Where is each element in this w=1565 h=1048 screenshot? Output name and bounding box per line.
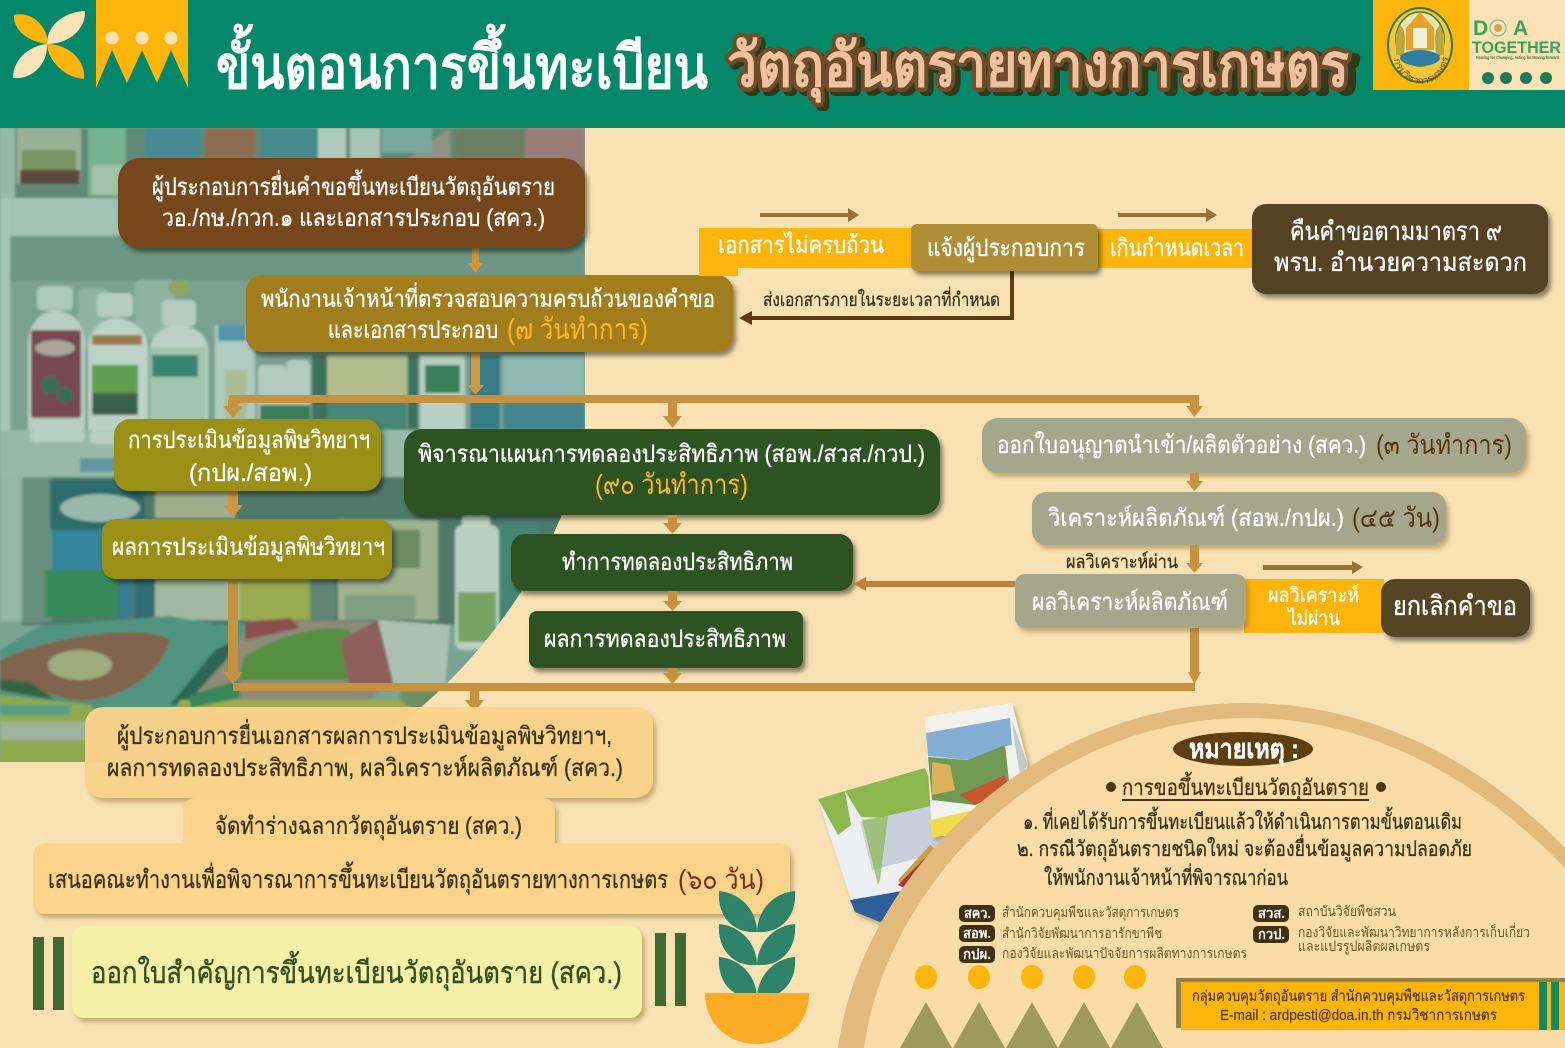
text: failed line 1: ผลวิเคราะห์ [1268, 584, 1359, 607]
logo block: department seal: กรมวิชาการเกษตร [1394, 56, 1448, 84]
text: analysis result: ผลวิเคราะห์ผลิตภัณฑ์ [1032, 588, 1228, 616]
text: applicant line 2: วอ./กษ./กวก.๑ และเอกสารประกอบ (สคว.) [162, 205, 545, 232]
box: toxicology result [102, 519, 392, 579]
panel: notes arch [838, 703, 1565, 1048]
text: officer duration: (๗ วันทำการ) [507, 314, 648, 346]
box: analysis result [1015, 574, 1246, 628]
legend: สอพ [959, 925, 1162, 942]
icon: yellow crown [96, 0, 188, 88]
box: working group [33, 843, 790, 914]
arrow: branch to import licence [1186, 400, 1203, 417]
text: note 2 continued: ให้พนักงานเจ้าหน้าที่พิจารณาก่อน [1044, 863, 1288, 890]
text: submit results line 2: ผลการทดลองประสิทธิภาพ, ผลวิเคราะห์ผลิตภัณฑ์ (สคว.) [107, 754, 623, 782]
bar: analysis failed [1244, 579, 1384, 633]
text: officer line 2: และเอกสารประกอบ [328, 317, 498, 344]
text: draft label: จัดทำร่างฉลากวัตถุอันตราย (สคว.) [215, 813, 522, 841]
box: draft label [183, 798, 555, 851]
text: toxicology line 2: (กปผ./สอพ.) [189, 460, 312, 487]
logo block: department seal [1373, 0, 1469, 90]
decoration: olive triangles [900, 1002, 1163, 1048]
legend: สอพ: สอพ. [963, 925, 991, 941]
heading: registration request: การขอขึ้นทะเบียนวัตถุอันตราย [1122, 772, 1369, 801]
text: incomplete: เอกสารไม่ครบถ้วน [718, 231, 884, 259]
arrow: toxicology result to bottom line [223, 579, 243, 684]
box: applicant submits [118, 158, 585, 248]
connector: analysis result to bottom line [1188, 628, 1201, 684]
icon: four petal flower [13, 11, 85, 79]
text: conduct trial: ทำการทดลองประสิทธิภาพ [562, 549, 793, 576]
legend: สคว [959, 904, 1179, 922]
arrow: officer to branch line [467, 352, 484, 395]
text: return line 1: คืนคำขอตามมาตรา ๙ [1290, 216, 1502, 246]
arrow: licence to analysis [1186, 473, 1203, 491]
picture: product box [818, 768, 1000, 922]
text: trial result: ผลการทดลองประสิทธิภาพ [544, 626, 786, 653]
legend: สวส: สวส. [1258, 905, 1285, 921]
title: highlighted part: วัตถุอันตรายทางการเกษตร [727, 32, 1349, 103]
box: notify applicant [911, 224, 1098, 271]
logo block: DOA together: D [1473, 17, 1488, 40]
text: notify: แจ้งผู้ประกอบการ [927, 235, 1085, 263]
text: return line 2: พรบ. อำนวยความสะดวก [1274, 247, 1527, 277]
logo block: DOA together: TOGETHER [1472, 38, 1561, 57]
panel: contact footer [1176, 978, 1565, 1030]
logo block: DOA together [1469, 0, 1565, 90]
box: return request [1252, 204, 1548, 294]
legend: กวป: กวป. [1258, 926, 1285, 942]
picture: product bag [925, 703, 1028, 840]
legend: สคว: สคว. [964, 905, 991, 921]
text: analysis passed: ผลวิเคราะห์ผ่าน [1066, 551, 1178, 573]
photo: pesticide shelves [0, 128, 585, 768]
arrow: to cancel [1263, 561, 1363, 574]
text: applicant line 1: ผู้ประกอบการยื่นคำขอขึ้นทะเบียนวัตถุอันตราย [152, 169, 555, 202]
icon: potted plant [705, 891, 809, 1044]
text: analysis duration: (๔๕ วัน) [1352, 503, 1440, 533]
text: past deadline: เกินกำหนดเวลา [1110, 235, 1244, 262]
text: toxicology result: ผลการประเมินข้อมูลพิษวิทยาฯ [112, 534, 385, 562]
text: efficacy duration: (๙๐ วันทำการ) [595, 469, 748, 500]
arrow: analysis to result [1186, 545, 1203, 573]
arrow: trial result to bottom line [663, 668, 682, 684]
text: product analysis: วิเคราะห์ผลิตภัณฑ์ (สอพ./กปผ.) [1048, 504, 1344, 532]
text: cancel: ยกเลิกคำขอ [1393, 591, 1517, 621]
arrow: to applicant submits results [465, 688, 484, 712]
decorative bars: left [33, 937, 64, 1010]
box: import licence [982, 418, 1526, 473]
arrow: analysis result to trial [853, 577, 1015, 591]
bar: incomplete documents [699, 228, 915, 276]
legend: กวป [1253, 923, 1530, 955]
arrow: branch to toxicology [223, 400, 243, 418]
legend: กวป: และแปรรูปผลิตผลเกษตร [1298, 938, 1430, 955]
box: product analysis [1032, 492, 1446, 545]
text: submit results line 1: ผู้ประกอบการยื่นเอกสารผลการประเมินข้อมูลพิษวิทยาฯ, [117, 719, 612, 751]
text: submit within deadline: ส่งเอกสารภายในระยะเวลาที่กำหนด [763, 286, 1000, 311]
legend: สคว: สำนักควบคุมพืชและวัสดุการเกษตร [1002, 904, 1179, 921]
legend: กวป: กองวิจัยและพัฒนาวิทยาการหลังการเก็บเกี่ยว [1298, 923, 1530, 940]
arrow: to notify [760, 208, 859, 222]
box: applicant submits results [85, 707, 653, 798]
decorative bars: right [655, 933, 686, 1006]
text: failed line 2: ไม่ผ่าน [1286, 607, 1340, 630]
legend: สวส [1253, 903, 1396, 922]
arrow: to return request [1118, 208, 1217, 222]
legend: สวส: สถาบันวิจัยพืชสวน [1298, 903, 1396, 919]
title: white part: ขั้นตอนการขึ้นทะเบียน [216, 23, 708, 101]
arrow: resubmit documents back to officer [739, 271, 1012, 325]
arrow: trial to result [663, 591, 682, 611]
arrow: applicant to officer [468, 248, 483, 273]
legend: กปผ: กปผ. [963, 946, 991, 962]
text: officer line 1: พนักงานเจ้าหน้าที่ตรวจสอบความครบถ้วนของคำขอ [261, 282, 715, 313]
box: conduct trial [511, 534, 853, 591]
text: licence duration: (๓ วันทำการ) [1376, 430, 1512, 460]
text: toxicology line 1: การประเมินข้อมูลพิษวิทยาฯ [128, 427, 370, 455]
text: efficacy plan: พิจารณาแผนการทดลองประสิทธิภาพ (สอพ./สวส./กวป.) [418, 441, 925, 468]
box: toxicology evaluation [114, 419, 381, 491]
text: note 2: ๒. กรณีวัตถุอันตรายชนิดใหม่ จะต้องยื่นข้อมูลความปลอดภัย [1017, 834, 1472, 862]
box: issue registration [72, 926, 642, 1018]
heading: notes pill: หมายเหตุ : [1189, 734, 1299, 766]
box: cancel request [1381, 579, 1530, 637]
header band [0, 0, 1565, 128]
arrow: branch to efficacy plan [663, 400, 682, 428]
legend: กปผ: กองวิจัยและพัฒนาปัจจัยการผลิตทางการเกษตร [1002, 945, 1247, 961]
text: import licence: ออกใบอนุญาตนำเข้า/ผลิตตัวอย่าง (สคว.) [997, 431, 1366, 460]
connector: top horizontal branch [229, 395, 1199, 403]
title: highlighted part: วัตถุอันตรายทางการเกษตร [731, 36, 1357, 107]
box: officer check [246, 275, 733, 352]
text: working group duration: (๖๐ วัน) [678, 864, 764, 895]
text: issue registration: ออกใบสำคัญการขึ้นทะเบียนวัตถุอันตราย (สคว.) [91, 951, 622, 992]
arrow: toxicology to result [223, 491, 243, 517]
arrow: plan to trial [663, 515, 682, 534]
connector: bottom horizontal line [233, 683, 1195, 691]
text: contact line 2: E-mail : ardpesti@doa.in.th กรมวิชาการเกษตร [1220, 1007, 1497, 1024]
box: trial result [529, 611, 803, 668]
legend: กปผ [959, 945, 1247, 963]
logo block: DOA together: A [1513, 17, 1528, 40]
bar: past deadline [1095, 229, 1255, 268]
box: efficacy plan [404, 429, 940, 515]
legend: สอพ: สำนักวิจัยพัฒนาการอารักขาพืช [1002, 925, 1162, 941]
decoration: orange dots [915, 965, 1146, 989]
text: working group: เสนอคณะทำงานเพื่อพิจารณาการขึ้นทะเบียนวัตถุอันตรายทางการเกษตร [48, 861, 668, 895]
